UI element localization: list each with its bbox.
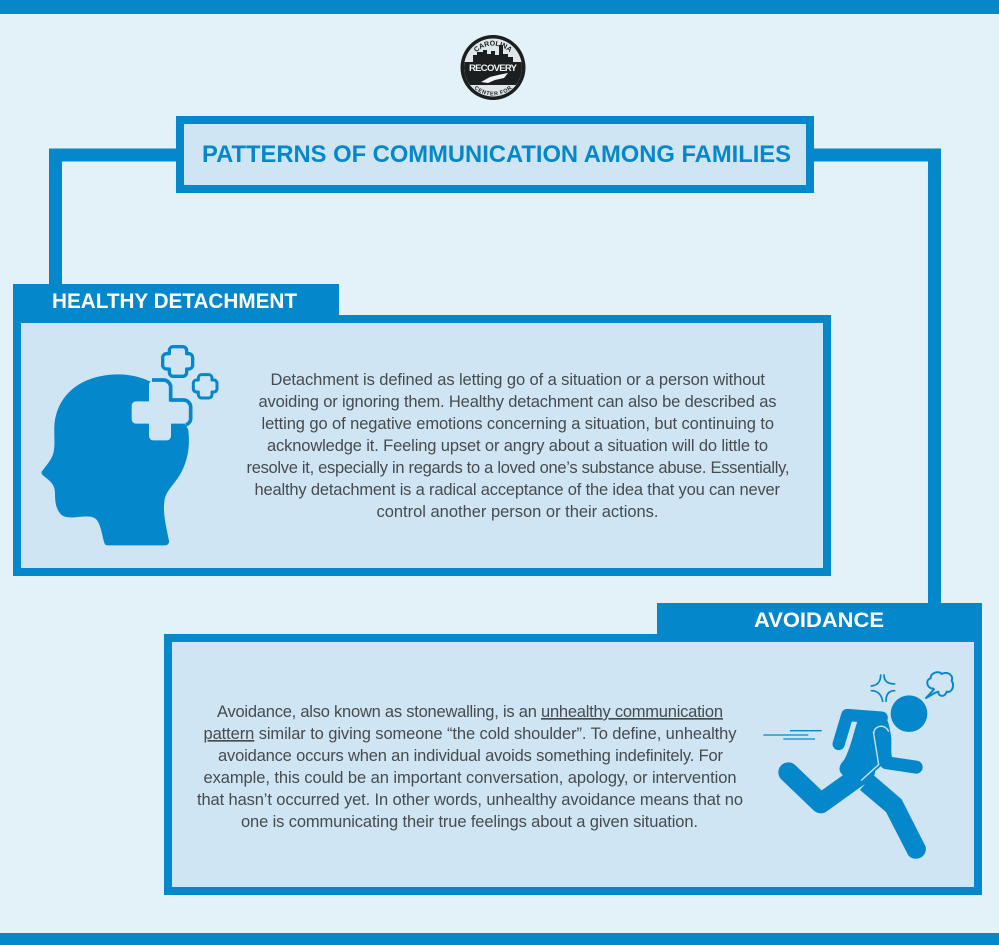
logo: Carolina Recovery Center: CAROLINA <box>474 40 512 52</box>
connector: right line from title to avoidance <box>813 155 934 610</box>
title: PATTERNS OF COMMUNICATION AMONG FAMILIES <box>202 141 791 168</box>
text block: avoidance description: avoidance occurs when an individual avoids something indefinitely. For <box>218 747 724 765</box>
text block: avoidance description <box>197 703 743 831</box>
logo: Carolina Recovery Center <box>460 35 526 100</box>
text block: healthy detachment description: acknowledge it. Feeling upset or angry about a situation will do little to <box>267 437 768 455</box>
panel: healthy detachment <box>13 284 827 572</box>
text block: avoidance description: that hasn’t occurred yet. In other words, unhealthy avoidance means that no <box>197 791 743 809</box>
icon: head with medical crosses <box>41 347 217 545</box>
text block: healthy detachment description: resolve it, especially in regards to a loved one’s substance abuse. Essentially, <box>246 459 790 477</box>
text block: healthy detachment description <box>246 371 790 521</box>
heading tab: healthy detachment: HEALTHY DETACHMENT <box>52 290 297 313</box>
text block: healthy detachment description: letting go of negative emotions concerning a situation, but continuing to <box>262 415 774 433</box>
heading tab: healthy detachment <box>13 284 339 322</box>
text block: avoidance description: Avoidance, also known as stonewalling, is an unhealthy communication <box>217 703 723 721</box>
title box <box>180 120 810 189</box>
logo: Carolina Recovery Center: CENTER FOR <box>474 86 512 96</box>
text block: avoidance description: example, this could be an important conversation, apology, or intervention <box>204 769 736 787</box>
heading tab: avoidance: AVOIDANCE <box>754 609 884 632</box>
panel: avoidance <box>168 603 982 891</box>
text block: healthy detachment description: avoiding or ignoring them. Healthy detachment can also be described as <box>258 393 776 411</box>
text block: healthy detachment description: Detachment is defined as letting go of a situation or a person without <box>270 371 765 389</box>
text block: avoidance description: pattern similar to giving someone “the cold shoulder”. To define, unhealthy <box>204 725 737 743</box>
heading tab: avoidance <box>657 603 982 640</box>
icon: running angry figure <box>763 672 953 859</box>
text block: healthy detachment description: control another person or their actions. <box>376 503 658 521</box>
text block: avoidance description: one is communicating their true feelings about a given situation. <box>241 813 698 831</box>
text block: healthy detachment description: healthy detachment is a radical acceptance of the idea that you can never <box>254 481 780 499</box>
logo: Carolina Recovery Center: RECOVERY <box>469 63 518 74</box>
connector: left line from title to healthy detachment <box>56 155 176 290</box>
